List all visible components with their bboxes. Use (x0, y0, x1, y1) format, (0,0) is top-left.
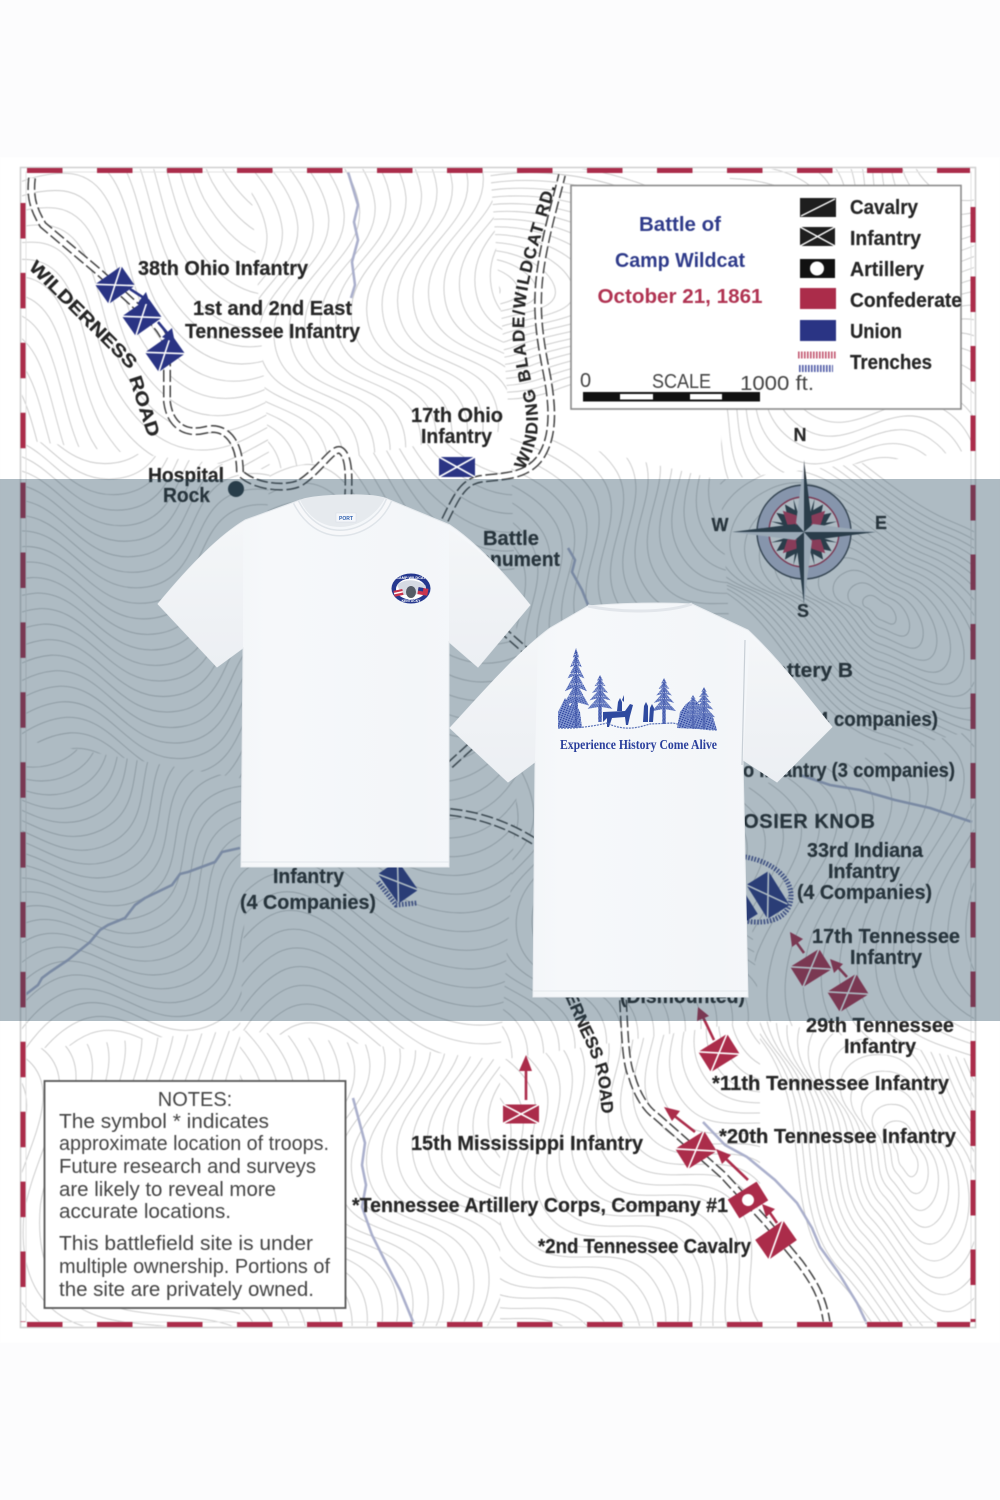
front hem (241, 861, 449, 863)
union movement arrows (130, 289, 175, 343)
notes text: approximate locations: approximate location of troops. (59, 1133, 329, 1155)
confederate infantry: 11th Tennessee (698, 1034, 740, 1072)
label: 2nd Tennessee Cavalry: *2nd Tennessee Cavalry (538, 1236, 752, 1258)
tree: third pine (652, 678, 676, 724)
label: Battery B: Battery B (760, 660, 853, 682)
confederate infantry: 20th Tennessee (675, 1131, 717, 1169)
road label: Road: ROAD (125, 373, 164, 439)
legend labels (850, 197, 962, 374)
bushes at right (677, 698, 717, 730)
compass letter W: W (712, 515, 728, 535)
label: Infantry 4 Companies (240, 866, 376, 914)
notes text: approximate locations: The symbol * indicates (59, 1111, 269, 1133)
front left sleeve shading (158, 522, 243, 667)
union infantry: 2nd East Tennessee (145, 334, 185, 372)
label: 1st and 2nd East Tennessee Infantry: 1st and 2nd East (193, 298, 352, 320)
map panel (20, 166, 976, 1328)
label: 17th Tennessee Infantry (812, 926, 960, 969)
Union troop markers (95, 266, 790, 927)
label: 33rd Indiana Infantry: 33rd Indiana (807, 840, 924, 862)
union infantry: 17th Ohio (439, 457, 475, 477)
map border (20, 168, 976, 1328)
label: 4 companies: (4 companies) (812, 709, 938, 731)
label: Battle Monument: Monument (462, 549, 560, 571)
notes text: ownership: multiple ownership. Portions of (59, 1256, 330, 1278)
streams (25, 172, 972, 1324)
tree artwork (558, 648, 717, 730)
legend labels: Artillery (850, 259, 925, 281)
label: Hospital Rock (148, 465, 224, 507)
road: Winding Blade / Wildcat Road (445, 175, 562, 520)
logo: Camp Wildcat badge: CAMP WILDCAT (396, 576, 426, 580)
legend labels: Union (850, 321, 902, 343)
compass letter E: E (875, 513, 887, 533)
label: 17th Ohio Infantry (411, 405, 503, 448)
translucent band (0, 479, 1000, 1021)
notes text: approximate locations: are likely to reveal more (59, 1179, 276, 1201)
notes text: ownership: This battlefield site is under (59, 1233, 313, 1255)
label: Tennessee Artillery Corps: *Tennessee Artillery Corps, Company #1 (352, 1195, 728, 1217)
scale bar (580, 370, 814, 402)
label: 29th Tennessee Infantry: Infantry (844, 1036, 917, 1058)
horse and rider (603, 695, 633, 727)
legend symbol: confederate (800, 288, 836, 309)
scale bar: 0 (580, 370, 591, 392)
label: Hospital Rock: Hospital (148, 465, 224, 487)
legend labels: Confederate (850, 290, 962, 312)
label: 33rd Indiana Infantry: (4 Companies) (797, 882, 932, 904)
label: Battle Monument: Battle (483, 528, 539, 550)
road label: Wilderness: WILDERNESS (25, 257, 141, 373)
notes text: ownership: the site are privately owned. (59, 1279, 314, 1301)
front collar (296, 494, 389, 533)
notes text: approximate locations (59, 1111, 329, 1223)
panel: notes (44, 1081, 346, 1308)
panel: legend (571, 186, 962, 409)
label: 29th Tennessee Infantry (806, 1015, 954, 1058)
t-shirt back (450, 603, 832, 997)
road label: Winding Blade / Wildcat Rd.: WINDING BLADE/WILDCAT RD. (512, 186, 556, 468)
confederate infantry: 17th Tennessee (790, 949, 832, 987)
compass rose (732, 460, 876, 604)
front right sleeve shading (449, 530, 530, 667)
back collar (588, 604, 692, 611)
notes text: ownership (59, 1233, 330, 1301)
label: 33rd Indiana Infantry (797, 840, 932, 904)
road: Wilderness Road south (450, 628, 827, 1324)
topographic contour lines (22, 168, 974, 1326)
logo: Camp Wildcat badge: KENTUCKY (402, 599, 421, 603)
confederate artillery (728, 1182, 768, 1218)
road label: Wilderness Road south: WILDERNESS ROAD (565, 998, 614, 1114)
notes text: approximate locations: accurate locations. (59, 1201, 231, 1223)
road: Wilderness Road north (31, 178, 349, 500)
union infantry: 38th Ohio (95, 266, 135, 304)
legend labels: Trenches (850, 352, 932, 374)
confederate infantry: 15th Mississippi (503, 1104, 539, 1124)
label: Ohio Infantry 3 companies: o Infantry (3 companies) (743, 760, 955, 782)
confederate cavalry (755, 1220, 797, 1260)
union infantry: 1st East Tennessee (122, 298, 162, 336)
notes heading: NOTES: (158, 1089, 232, 1111)
label: 29th Tennessee Infantry: 29th Tennessee (806, 1015, 954, 1037)
legend title: October 21, 1861 (598, 286, 762, 308)
label: Battle Monument (462, 528, 560, 571)
notes text: approximate locations: Future research and surveys (59, 1156, 316, 1178)
confederate infantry: 29th Tennessee (827, 974, 869, 1012)
union infantry: 33rd Indiana (746, 871, 790, 919)
legend symbol: cavalry (800, 198, 836, 217)
back right sleeve shading (743, 637, 832, 782)
label: 15th Mississippi Infantry: 15th Mississippi Infantry (411, 1133, 644, 1155)
ground line (558, 723, 717, 730)
compass letter N: N (794, 425, 806, 445)
tree: fourth pine (693, 687, 715, 729)
tree: tall pine (563, 648, 589, 728)
compass dark secondary spikes (769, 497, 839, 567)
legend symbol: trenches (798, 355, 836, 368)
compass cardinal points (732, 460, 876, 604)
scale bar: 1000 ft. (740, 373, 814, 395)
legend symbol: infantry (800, 227, 835, 246)
label: 17th Ohio Infantry: Infantry (421, 426, 493, 448)
label: 17th Ohio Infantry: 17th Ohio (411, 405, 503, 427)
label: Hoosier Knob: HOOSIER KNOB (712, 811, 875, 833)
logo: Camp Wildcat badge (392, 574, 430, 604)
label: Hospital Rock: Rock (163, 485, 211, 507)
label: 20th Tennessee Infantry: *20th Tennessee Infantry (719, 1126, 957, 1148)
label: 38th Ohio Infantry: 38th Ohio Infantry (138, 258, 309, 280)
legend labels: Infantry (850, 228, 922, 250)
front neck tag (336, 513, 356, 522)
standing soldiers (643, 702, 654, 722)
slogan: Experience History Come Alive (560, 738, 717, 753)
label: 1st and 2nd East Tennessee Infantry (185, 298, 361, 343)
legend symbol: artillery (800, 259, 835, 278)
union infantry: hidden company (718, 883, 758, 927)
label: 33rd Indiana Infantry: Infantry (828, 861, 901, 883)
label: Infantry 4 Companies: Infantry (273, 866, 345, 888)
label: Infantry 4 Companies: (4 Companies) (240, 892, 376, 914)
bushes at left (558, 698, 582, 728)
legend title: Battle of (639, 214, 721, 236)
back hem (533, 990, 748, 992)
compass letter S: S (797, 601, 809, 621)
legend labels: Cavalry (850, 197, 919, 219)
legend title: Camp Wildcat (615, 250, 745, 272)
confederate movement arrows (519, 932, 847, 1223)
compass red diamonds (778, 506, 830, 558)
roads (31, 175, 827, 1324)
union trenches (378, 857, 791, 922)
scale bar: SCALE (652, 371, 711, 393)
label: 17th Tennessee Infantry: 17th Tennessee (812, 926, 960, 948)
marker: Hospital Rock (228, 481, 244, 497)
t-shirt front (158, 494, 530, 867)
union infantry: 4 companies (378, 860, 418, 904)
tree: second pine (588, 675, 612, 722)
legend title (598, 214, 762, 308)
Confederate troop markers (503, 949, 869, 1260)
label: 17th Tennessee Infantry: Infantry (850, 947, 923, 969)
back left sleeve shading (450, 638, 538, 782)
tree: fifth pine (683, 695, 703, 728)
label: 11th Tennessee Infantry: *11th Tennessee Infantry (712, 1073, 950, 1095)
label: 1st and 2nd East Tennessee Infantry: Tennessee Infantry (185, 321, 361, 343)
legend symbol: union (800, 320, 836, 341)
front neck tag: PORT (339, 516, 353, 522)
label: Dismounted: (Dismounted) (620, 986, 745, 1008)
